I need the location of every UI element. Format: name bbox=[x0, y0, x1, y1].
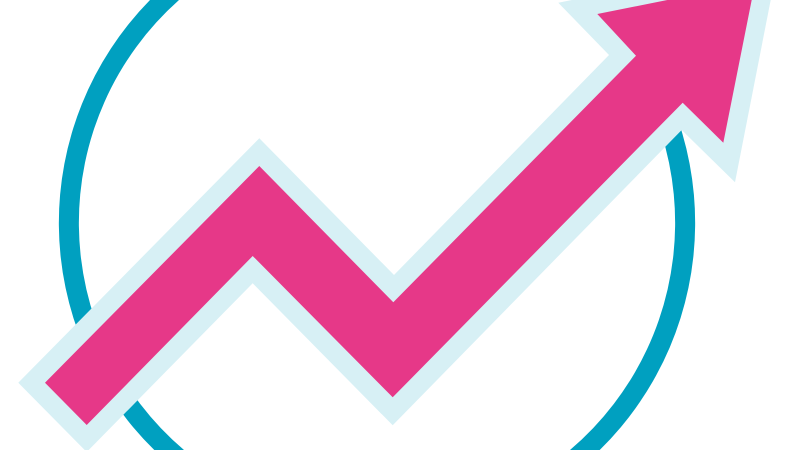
teal circle ring, cropped by the frame bbox=[59, 0, 695, 450]
